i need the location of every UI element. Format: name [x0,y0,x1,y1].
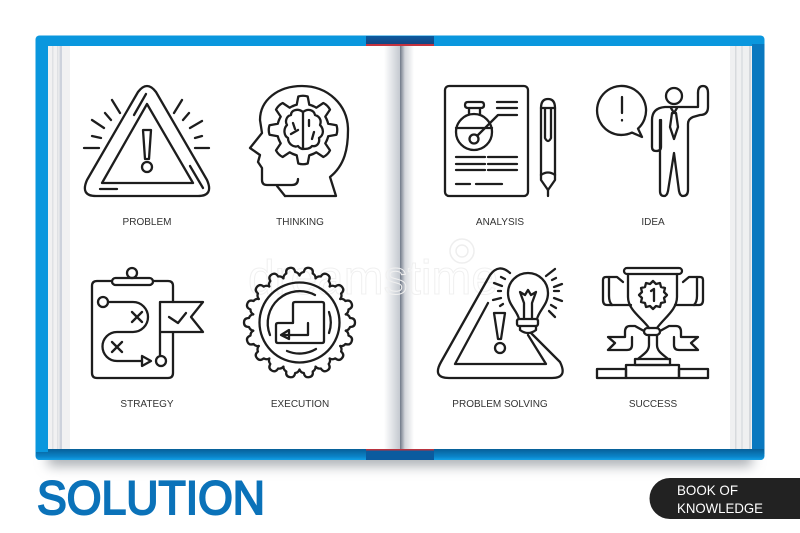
bottom cover edge [36,449,764,460]
icon: idea person with speech bubble [597,86,708,196]
icon: problem warning triangle [84,86,209,196]
label: problem: PROBLEM [123,217,171,228]
book drop shadow [48,450,752,466]
watermark: dreamstime [248,252,498,305]
badge: book of knowledge: BOOK OF [677,482,738,498]
label: strategy: STRATEGY [120,399,174,410]
icon: problem solving triangle and bulb [438,268,563,378]
gutter shadow right [400,46,414,449]
icon: execution gear [244,266,355,379]
left page [48,46,400,449]
book [36,36,764,460]
spine bottom [366,449,434,460]
icon: thinking head with gear and brain [250,86,348,196]
icon: strategy clipboard with flag [92,268,203,378]
spine top [366,36,434,46]
icon: analysis document and pen [445,86,555,196]
label: execution: EXECUTION [271,399,329,410]
right page stack [730,46,752,449]
label: idea: IDEA [641,217,665,228]
label: thinking: THINKING [276,217,324,228]
title: SOLUTION [37,471,265,524]
label: success: SUCCESS [629,399,677,410]
left page stack [48,46,70,449]
label: problem solving: PROBLEM SOLVING [452,399,548,410]
badge: book of knowledge: KNOWLEDGE [677,500,763,516]
spine bottom red bookmark [366,449,434,450]
icon: success trophy [597,268,708,378]
gutter shadow left [384,46,400,449]
badge: book of knowledge [650,478,800,519]
right cover edge [752,44,764,454]
label: analysis: ANALYSIS [476,217,524,228]
blue book cover [36,36,764,460]
right page [400,46,752,449]
spine top red bookmark [366,44,434,46]
